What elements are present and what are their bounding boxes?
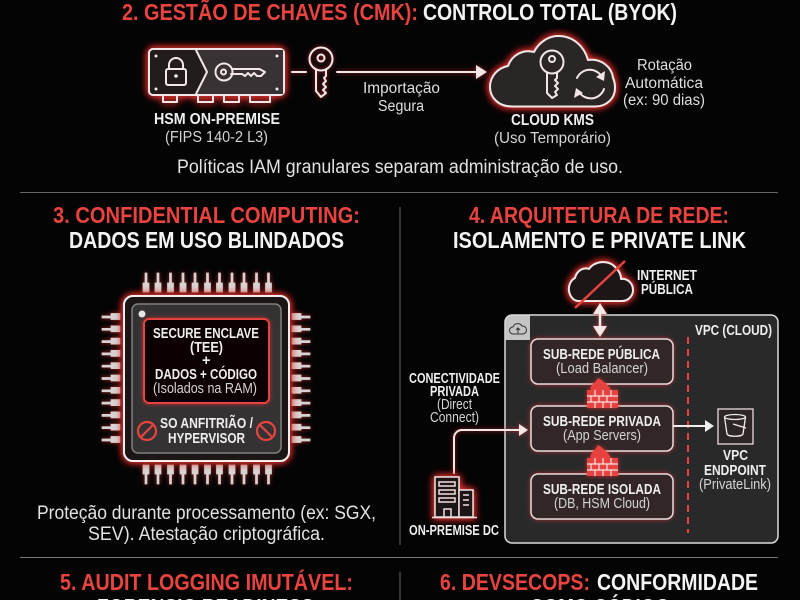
public subnet: (Load Balancer): [556, 361, 648, 377]
text: processing protection: [37, 503, 376, 545]
label: secure import: Segura: [378, 98, 424, 115]
text: processing protection: SEV). Atestação criptográfica.: [88, 524, 325, 545]
heading: section 4: 4. ARQUITETURA DE REDE:: [469, 202, 729, 228]
label: private connectivity: (Direct: [437, 397, 472, 413]
icon: VPC endpoint bucket: [718, 409, 753, 444]
label: automatic rotation: [623, 57, 705, 109]
heading: section 3: DADOS EM USO BLINDADOS: [69, 227, 344, 253]
heading: section 3: 3. CONFIDENTIAL COMPUTING:: [53, 202, 360, 228]
panel: section 6 DevSecOps heading: [440, 569, 758, 600]
text: IAM policies: Políticas IAM granulares separam administração de uso.: [177, 157, 623, 178]
panel: section 4 network architecture: [409, 202, 778, 543]
icon: firewall 1: [587, 378, 618, 408]
arrow: import line with key: [292, 48, 487, 97]
secure enclave: (Isolados na RAM): [153, 381, 257, 397]
label: automatic rotation: (ex: 90 dias): [623, 92, 705, 109]
label: cloud KMS: [494, 112, 611, 147]
icon: firewall 2: [587, 445, 618, 476]
host OS / hypervisor blocked: HYPERVISOR: [168, 431, 245, 447]
arrow: direct connect: [454, 424, 528, 474]
heading: section 2: [122, 0, 677, 25]
label: secure import: [363, 80, 440, 115]
panel: section 6 DevSecOps heading: CONFORMIDADE: [597, 569, 758, 595]
label: VPC endpoint: ENDPOINT: [704, 463, 766, 479]
isolated subnet: SUB-REDE ISOLADA: [543, 482, 661, 498]
panel: section 2 key management: [122, 0, 705, 178]
label: automatic rotation: Automática: [625, 75, 703, 92]
host OS / hypervisor blocked: SO ANFITRIÃO /: [160, 414, 253, 432]
private subnet: (App Servers): [563, 428, 641, 444]
label: automatic rotation: Rotação: [637, 57, 692, 74]
label: cloud KMS: CLOUD KMS: [511, 112, 594, 129]
panel: section 5 audit logging heading: 5. AUDIT LOGGING IMUTÁVEL:: [60, 568, 353, 595]
arrow: internet to public subnet: [593, 303, 607, 337]
panel: section 6 DevSecOps heading: 6. DEVSECOPS:: [440, 569, 590, 595]
private subnet: SUB-REDE PRIVADA: [543, 414, 661, 430]
heading: section 3: [53, 202, 360, 253]
secure enclave: +: [202, 353, 210, 369]
icon: cloud KMS with key and rotation: [490, 36, 615, 106]
icon: public internet cloud blocked: [569, 261, 633, 308]
heading: section 4: ISOLAMENTO E PRIVATE LINK: [453, 227, 746, 253]
public subnet: SUB-REDE PÚBLICA: [543, 345, 660, 363]
label: on-premise DC: ON-PREMISE DC: [409, 523, 499, 539]
host OS / hypervisor blocked: [138, 414, 275, 447]
label: private connectivity: [409, 371, 500, 426]
label: HSM on-premise: [154, 111, 280, 146]
label: private connectivity: PRIVADA: [430, 384, 479, 400]
secure enclave: (TEE): [190, 340, 223, 356]
chip pins: [102, 273, 310, 484]
label: private connectivity: Connect): [430, 410, 479, 426]
private subnet: [531, 406, 673, 451]
panel: section 3 confidential computing: [37, 202, 376, 545]
icon: processor chip: [102, 273, 310, 484]
secure enclave: [144, 319, 269, 403]
label: public internet: INTERNET: [637, 268, 697, 284]
chip body: [124, 296, 289, 461]
heading: section 4: [453, 202, 746, 253]
label: secure import: Importação: [363, 80, 440, 97]
icon: HSM on-premise device: [149, 49, 284, 102]
label: cloud KMS: (Uso Temporário): [494, 130, 611, 147]
icon: on-premise data center: [432, 477, 477, 518]
VPC container: [505, 315, 778, 543]
label: public internet: [637, 268, 697, 298]
VPC container: VPC (CLOUD): [695, 323, 772, 339]
text: processing protection: Proteção durante processamento (ex: SGX,: [37, 503, 376, 524]
label: public internet: PÚBLICA: [641, 280, 693, 298]
label: HSM on-premise: HSM ON-PREMISE: [154, 111, 280, 128]
public subnet: [531, 339, 673, 384]
label: VPC endpoint: (PrivateLink): [699, 477, 771, 493]
label: HSM on-premise: (FIPS 140-2 L3): [165, 129, 268, 146]
arrow: private subnet to VPC endpoint: [673, 420, 714, 432]
label: VPC endpoint: VPC: [723, 448, 748, 464]
secure enclave: DADOS + CÓDIGO: [155, 365, 257, 383]
secure enclave: SECURE ENCLAVE: [153, 326, 259, 342]
isolated subnet: [531, 474, 673, 519]
label: private connectivity: CONECTIVIDADE: [409, 371, 500, 387]
isolated subnet: (DB, HSM Cloud): [554, 496, 650, 512]
label: VPC endpoint: [699, 448, 771, 493]
